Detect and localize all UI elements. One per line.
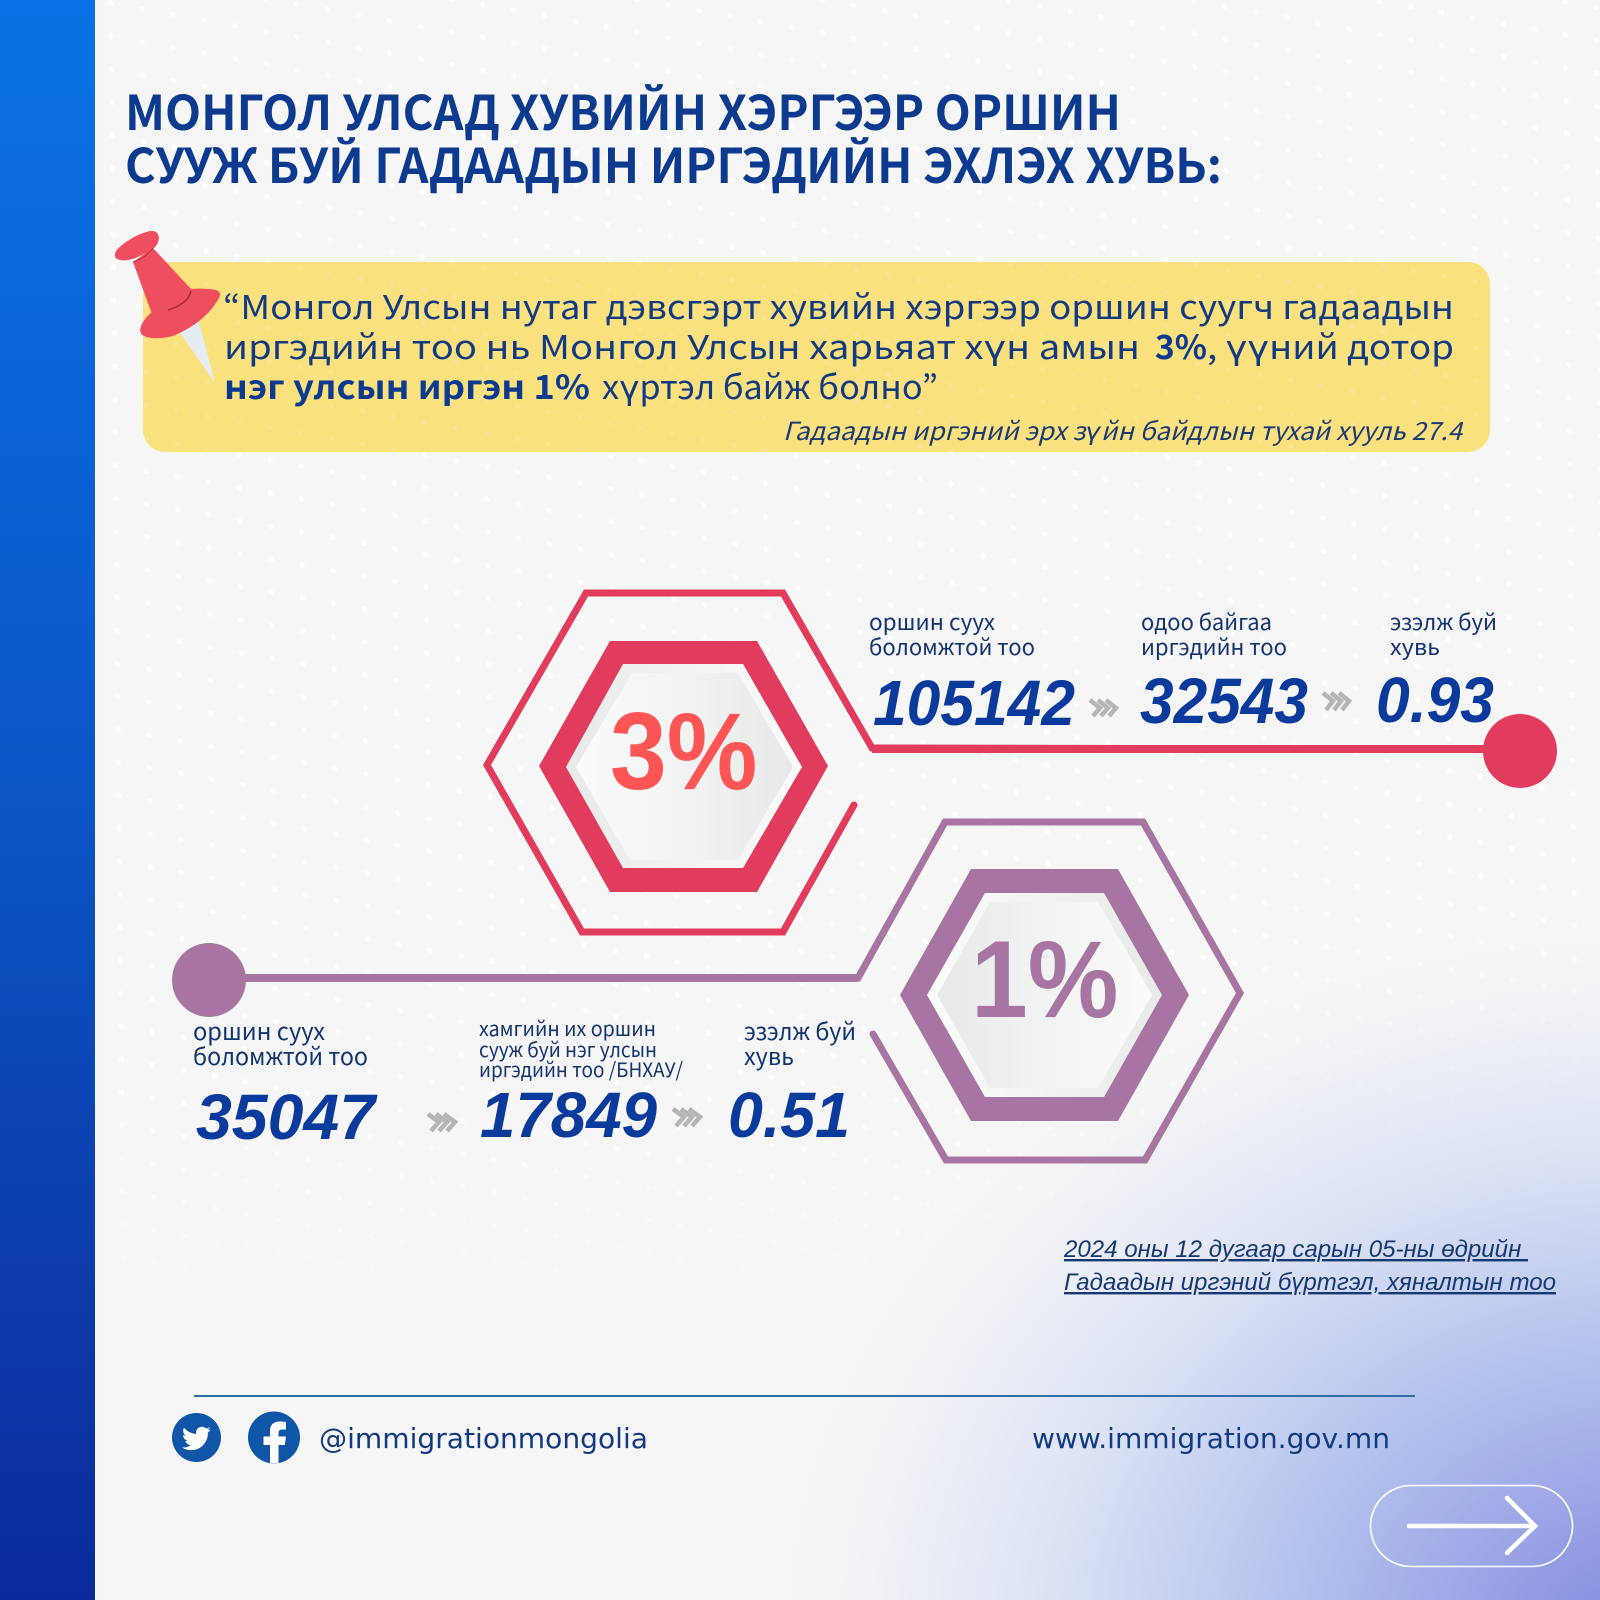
hexagon face (937, 902, 1152, 1088)
value: 0.51: 0.51 (728, 1079, 850, 1151)
title: МОНГОЛ УЛСАД ХУВИЙН ХЭРГЭЭР ОРШИН (125, 74, 1121, 144)
date note: 2024 оны 12 дугаар сарын 05-ны өдрийн (1063, 1236, 1528, 1263)
purple connector thickening (240, 974, 858, 982)
hexagon face (576, 673, 793, 860)
label: share (1390, 605, 1497, 662)
value: 0.93: 0.93 (1376, 664, 1494, 736)
label: largest single nationality: иргэдийн тоо /БНХАУ/ (479, 1054, 683, 1083)
red end circle (1483, 714, 1557, 788)
1 percent label: 1% (971, 919, 1118, 1041)
quote text (223, 281, 1454, 409)
label: share: хувь (744, 1038, 794, 1072)
quote text: , үүний дотор (1207, 321, 1454, 369)
value: 32543: 32543 (1140, 665, 1308, 737)
label: possible residents: оршин суух (193, 1013, 325, 1047)
panel: 1 percent figures (193, 1013, 856, 1153)
label: largest single nationality (479, 1013, 683, 1083)
label: possible residents: боломжтой тоо (869, 630, 1035, 662)
arrow button (1370, 1486, 1572, 1566)
label: share: эзэлж буй (744, 1013, 856, 1047)
title: СУУЖ БУЙ ГАДААДЫН ИРГЭДИЙН ЭХЛЭХ ХУВЬ: (125, 127, 1222, 197)
arrow: chevrons (1090, 700, 1116, 716)
panel: law quote (143, 262, 1490, 452)
quote text: нэг улсын иргэн 1% (224, 361, 590, 409)
left blue sidebar (0, 0, 95, 1600)
3 percent label: 3% (610, 691, 757, 813)
label: largest single nationality: сууж буй нэг улсын (479, 1034, 657, 1063)
website: www.immigration.gov.mn (1032, 1422, 1390, 1455)
quote text: “Монгол Улсын нутаг дэвсгэрт хувийн хэргээр оршин суугч гадаадын (223, 281, 1454, 329)
red outer hexagon and connector (487, 593, 1490, 932)
red connector thickening (872, 745, 1487, 753)
label: largest single nationality: хамгийн их оршин (479, 1013, 656, 1042)
red inner hexagon (539, 641, 828, 892)
label: share (744, 1013, 856, 1072)
label: possible residents: боломжтой тоо (193, 1038, 368, 1072)
social handle: @immigrationmongolia (319, 1422, 648, 1455)
label: share: эзэлж буй (1390, 605, 1497, 637)
panel: 1 percent (172, 822, 1240, 1160)
icon: facebook (248, 1412, 300, 1464)
label: possible residents (869, 605, 1035, 662)
panel: 3 percent figures (869, 605, 1497, 739)
date note: Гадаадын иргэний бүртгэл, хяналтын тоо (1064, 1269, 1556, 1296)
purple inner hexagon (900, 869, 1189, 1121)
panel: 3 percent (487, 593, 1557, 932)
purple end circle (172, 943, 246, 1017)
footer rule (194, 1395, 1415, 1397)
hexagon opening (927, 893, 1162, 1097)
label: current citizens (1141, 605, 1287, 662)
quote text: хүртэл байж болно” (602, 361, 938, 409)
value: 35047: 35047 (196, 1081, 378, 1153)
date note (1063, 1236, 1556, 1296)
arrow: chevrons (673, 1109, 700, 1126)
quote text: 3% (1155, 321, 1207, 369)
label: possible residents: оршин суух (869, 605, 995, 637)
quote source: Гадаадын иргэний эрх зүйн байдлын тухай хууль 27.4 (783, 412, 1464, 448)
label: share: хувь (1390, 630, 1440, 662)
hexagon opening (566, 664, 802, 868)
label: possible residents (193, 1013, 368, 1072)
label: current citizens: иргэдийн тоо (1141, 630, 1287, 662)
value: 105142: 105142 (873, 667, 1075, 739)
title (125, 74, 1222, 197)
icon: twitter (172, 1413, 221, 1462)
icon: push pin (115, 231, 220, 383)
arrow: chevrons (1323, 693, 1349, 710)
value: 17849: 17849 (480, 1079, 657, 1151)
quote text: иргэдийн тоо нь Монгол Улсын харьяат хүн амын (224, 321, 1140, 369)
arrow: chevrons (428, 1114, 455, 1131)
quote background (143, 262, 1490, 452)
footer (172, 1395, 1415, 1464)
purple outer hexagon and connector (240, 822, 1240, 1160)
label: current citizens: одоо байгаа (1141, 605, 1272, 637)
